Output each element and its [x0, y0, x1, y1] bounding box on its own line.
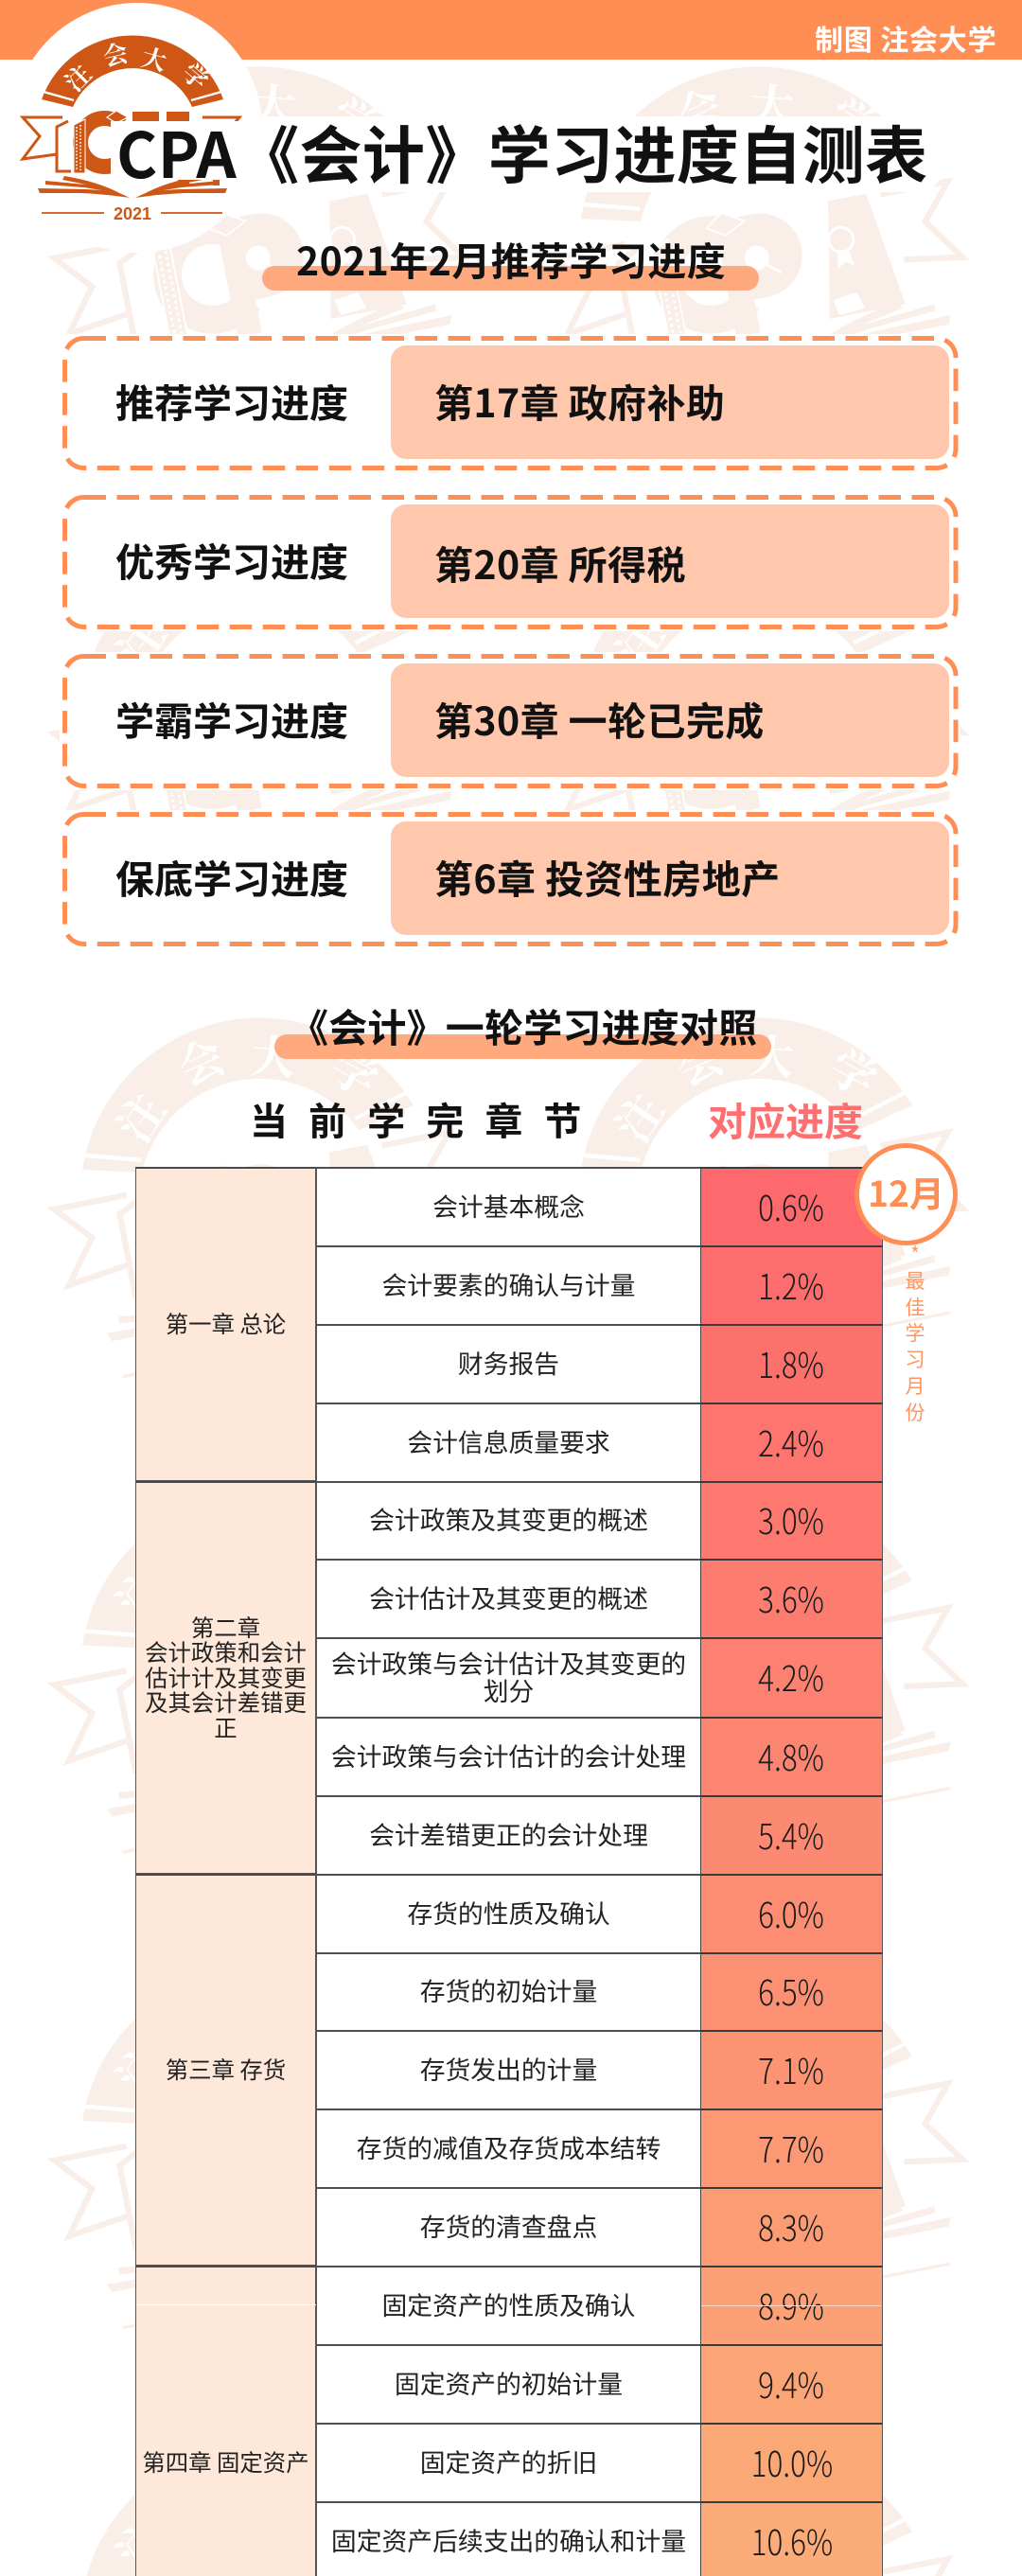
table row 16: 9.4% — [759, 2356, 824, 2408]
logo artwork: 学 — [175, 54, 217, 97]
panel: top-student progress — [60, 652, 960, 790]
badge: best month: 12月 — [868, 1166, 944, 1217]
panel: minimum progress: 第6章 投资性房地产 — [434, 848, 780, 905]
section heading 1: 2021年2月推荐学习进度 — [296, 230, 726, 287]
table row 7: 4.2% — [759, 1650, 824, 1702]
chapter cell: chapter 2: 会计政策和会计 — [145, 1635, 307, 1668]
note: best study month: 月 — [905, 1371, 925, 1400]
chapter cell: chapter 2: 估计计及其变更 — [145, 1661, 307, 1694]
logo artwork — [23, 34, 239, 223]
table row 17: 10.0% — [750, 2436, 833, 2487]
table row 4: 2.4% — [759, 1416, 824, 1467]
table row 10: 存货的性质及确认 — [407, 1894, 610, 1931]
table row 9 — [316, 1795, 883, 1874]
chapter cell: chapter 3 — [135, 1874, 316, 2266]
header bar — [0, 0, 1022, 60]
note: best study month: 份 — [905, 1398, 925, 1426]
title: CPA《会计》学习进度自测表 — [116, 106, 928, 197]
logo — [19, 3, 261, 253]
table row 9: 5.4% — [759, 1808, 824, 1859]
chapter cell: chapter 4: 第四章 固定资产 — [142, 2445, 309, 2479]
logo artwork: 会 — [99, 34, 131, 74]
table row 8: 4.8% — [759, 1730, 824, 1781]
note: best study month: 学 — [905, 1318, 925, 1347]
table row 18 — [316, 2501, 883, 2576]
table row 18: 10.6% — [750, 2514, 833, 2565]
table row 3 — [316, 1324, 883, 1403]
table row 1: 0.6% — [759, 1179, 824, 1230]
table row 8: 会计政策与会计估计的会计处理 — [331, 1737, 686, 1773]
panel: recommended progress: 推荐学习进度 — [115, 372, 348, 429]
table row 8 — [316, 1717, 883, 1795]
table row 4 — [316, 1403, 883, 1481]
table row 1: 会计基本概念 — [432, 1187, 585, 1224]
panel: top-student progress: 学霸学习进度 — [115, 690, 348, 747]
header credit: 制图 注会大学 — [815, 17, 996, 59]
table row 6: 会计估计及其变更的概述 — [369, 1579, 648, 1615]
table row 6: 3.6% — [759, 1571, 824, 1622]
panel: recommended progress — [60, 334, 960, 472]
note: best study month: 习 — [905, 1345, 925, 1373]
table row 9: 会计差错更正的会计处理 — [369, 1815, 648, 1852]
table row 10: 6.0% — [759, 1887, 824, 1938]
table row 14: 存货的清查盘点 — [420, 2207, 597, 2244]
logo artwork: 注 — [56, 56, 98, 98]
table row 14: 8.3% — [759, 2199, 824, 2250]
panel: top-student progress: 第30章 一轮已完成 — [434, 690, 765, 747]
table row 5: 会计政策及其变更的概述 — [369, 1500, 648, 1537]
chapter cell: chapter 4 — [135, 2266, 316, 2576]
table row 16: 固定资产的初始计量 — [395, 2364, 623, 2401]
table row 5 — [316, 1481, 883, 1559]
table row 11: 存货的初始计量 — [420, 1971, 597, 2008]
note: best study month: * — [910, 1240, 920, 1268]
table row 13 — [316, 2108, 883, 2187]
section pill 1 — [262, 266, 759, 291]
note: best study month — [905, 1240, 925, 1426]
table row 2 — [316, 1245, 883, 1324]
table row 5: 3.0% — [759, 1493, 824, 1544]
panel: excellent progress — [60, 493, 960, 631]
panel: minimum progress — [60, 810, 960, 948]
column heading: chapter: 当 前 学 完 章 节 — [250, 1091, 588, 1146]
panel: minimum progress: 保底学习进度 — [115, 848, 348, 905]
table row 17: 固定资产的折旧 — [420, 2443, 597, 2479]
chapter cell: chapter 1 — [135, 1167, 316, 1481]
table row 16 — [316, 2344, 883, 2423]
chapter cell: chapter 2: 及其会计差错更 — [145, 1685, 307, 1719]
table row 7: 划分 — [484, 1671, 534, 1707]
panel: recommended progress: 第17章 政府补助 — [434, 372, 725, 429]
table row 12: 存货发出的计量 — [420, 2050, 597, 2087]
title backing band — [111, 121, 243, 180]
table row 13: 7.7% — [759, 2122, 824, 2173]
table row 2: 1.2% — [759, 1259, 824, 1310]
note: best study month: 最 — [905, 1266, 925, 1295]
section heading 2: 《会计》一轮学习进度对照 — [290, 997, 757, 1053]
table row 15 — [316, 2266, 883, 2344]
table row 12: 7.1% — [759, 2042, 824, 2093]
table row 14 — [316, 2187, 883, 2266]
logo white halo — [12, 3, 262, 253]
table row 18: 固定资产后续支出的确认和计量 — [331, 2521, 686, 2558]
logo artwork: 大 — [138, 38, 170, 79]
table row 15: 固定资产的性质及确认 — [382, 2285, 635, 2322]
table row 2: 会计要素的确认与计量 — [382, 1265, 635, 1302]
logo artwork: 2021 — [114, 204, 151, 223]
table row 4: 会计信息质量要求 — [407, 1422, 610, 1459]
table row 1 — [316, 1167, 883, 1245]
table row 11: 6.5% — [759, 1965, 824, 2016]
chapter cell: chapter 2: 第二章 — [191, 1611, 260, 1644]
column heading: progress: 对应进度 — [708, 1090, 863, 1147]
title backing band right — [237, 116, 942, 192]
chapter cell: chapter 1: 第一章 总论 — [166, 1307, 286, 1340]
table row 7 — [316, 1637, 883, 1717]
note: best study month: 佳 — [905, 1293, 925, 1321]
panel: excellent progress: 第20章 所得税 — [434, 534, 686, 591]
table row 11 — [316, 1952, 883, 2030]
table row 17 — [316, 2423, 883, 2501]
chapter cell: chapter 2: 正 — [214, 1711, 238, 1744]
table row 15: 8.9% — [759, 2279, 824, 2330]
chapter cell: chapter 3: 第三章 存货 — [166, 2053, 286, 2086]
table row 13: 存货的减值及存货成本结转 — [357, 2128, 661, 2165]
table row 3: 1.8% — [759, 1336, 824, 1387]
table row 6 — [316, 1559, 883, 1637]
badge: best month — [855, 1143, 958, 1245]
section pill 2 — [274, 1034, 771, 1059]
chapter cell: chapter 2 — [135, 1481, 316, 1874]
panel: excellent progress: 优秀学习进度 — [115, 531, 348, 588]
table row 7: 会计政策与会计估计及其变更的 — [331, 1644, 686, 1681]
table row 3: 财务报告 — [458, 1344, 559, 1381]
table row 12 — [316, 2030, 883, 2108]
table row 10 — [316, 1874, 883, 1952]
